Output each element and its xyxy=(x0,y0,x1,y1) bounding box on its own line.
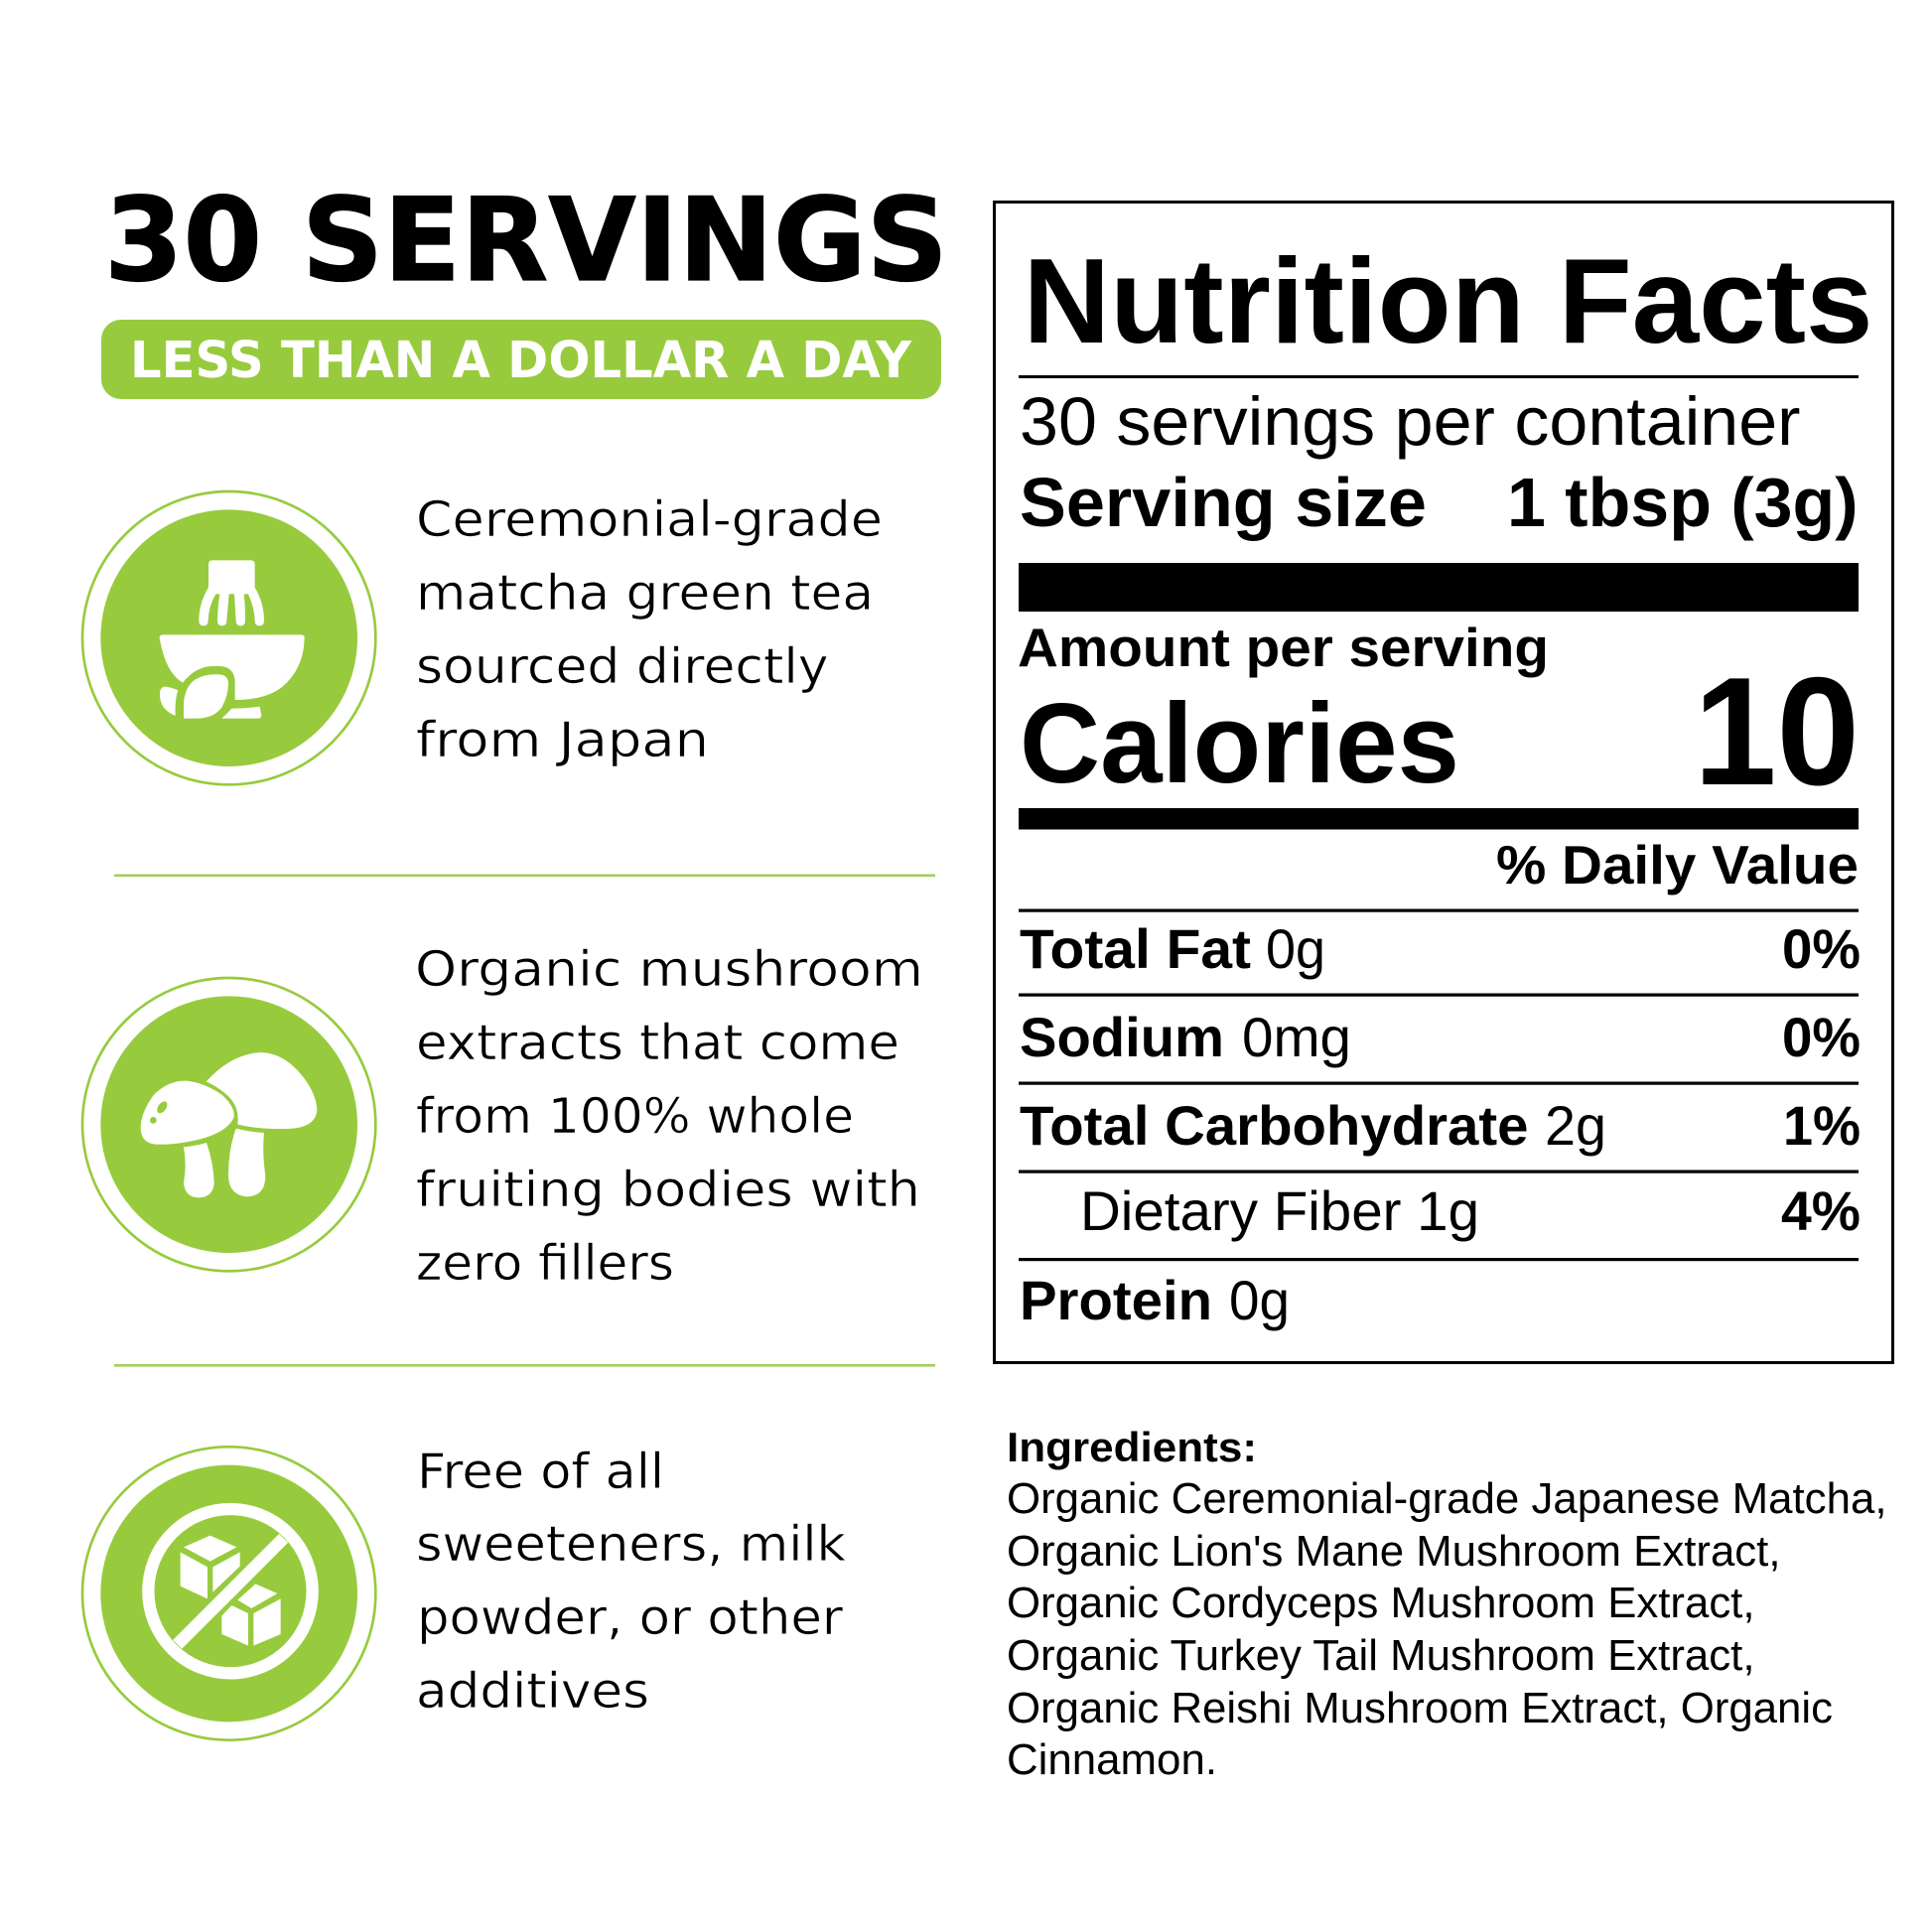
row: total fat xyxy=(1020,917,1861,980)
row: protein: Protein xyxy=(1020,1269,1212,1331)
text: mushroom description xyxy=(415,941,923,1292)
text: matcha description: from Japan xyxy=(416,712,709,768)
calories: 10 xyxy=(1694,645,1860,817)
heading: nutrition facts: Nutrition Facts xyxy=(1023,233,1872,368)
row: total fat: 0% xyxy=(1782,917,1861,980)
text: ingredients: Organic Lion's Mane Mushroom Extract, xyxy=(1007,1527,1781,1576)
row: sodium: 0mg xyxy=(1242,1006,1351,1068)
icon: no sugar cubes xyxy=(82,1447,375,1740)
text: matcha description: Ceremonial-grade xyxy=(416,491,883,548)
calories xyxy=(1020,645,1860,817)
text: additives description: Free of all xyxy=(417,1444,664,1500)
text: mushroom description: from 100% whole xyxy=(416,1088,854,1145)
serving size xyxy=(1020,464,1859,541)
text: matcha description: sourced directly xyxy=(416,638,828,695)
row: sodium xyxy=(1020,1006,1861,1068)
serving size: Serving size xyxy=(1020,464,1427,541)
servings per container: 30 servings per container xyxy=(1020,383,1801,460)
text: additives description xyxy=(416,1444,847,1720)
icon: matcha whisk and bowl xyxy=(82,491,375,784)
row: total carbohydrate: Total Carbohydrate xyxy=(1020,1094,1529,1157)
daily value header: % Daily Value xyxy=(1496,834,1859,896)
row: protein: 0g xyxy=(1229,1269,1290,1331)
text: matcha description xyxy=(416,491,883,768)
text: mushroom description: zero fillers xyxy=(416,1235,674,1292)
banner: less than a dollar a day: LESS THAN A DOLLAR A DAY xyxy=(130,332,912,390)
row: total carbohydrate xyxy=(1020,1094,1861,1157)
text: ingredients: Cinnamon. xyxy=(1007,1735,1217,1784)
serving size: 1 tbsp (3g) xyxy=(1507,464,1859,541)
row: sodium: Sodium xyxy=(1020,1006,1224,1068)
row: total fat: 0g xyxy=(1266,917,1325,980)
icon: mushrooms xyxy=(82,978,375,1271)
calories: Calories xyxy=(1020,681,1459,807)
text: ingredients xyxy=(1007,1424,1886,1784)
text: mushroom description: extracts that come xyxy=(416,1015,899,1071)
amount per serving: Amount per serving xyxy=(1018,617,1549,678)
text: additives description: sweeteners, milk xyxy=(416,1516,847,1573)
text: mushroom description: Organic mushroom xyxy=(415,941,923,998)
text: ingredients: Organic Ceremonial-grade Japanese Matcha, xyxy=(1007,1474,1886,1523)
text: ingredients: Organic Cordyceps Mushroom Extract, xyxy=(1007,1579,1755,1627)
text: additives description: powder, or other xyxy=(417,1589,844,1646)
text: ingredients: Organic Reishi Mushroom Extract, Organic xyxy=(1007,1684,1833,1732)
row: sodium: 0% xyxy=(1782,1006,1861,1068)
row: dietary fiber: 4% xyxy=(1781,1179,1861,1242)
row: total carbohydrate: 1% xyxy=(1783,1094,1861,1157)
text: mushroom description: fruiting bodies with xyxy=(416,1162,920,1218)
row: total fat: Total Fat xyxy=(1020,917,1251,980)
row: dietary fiber: Dietary Fiber 1g xyxy=(1080,1179,1479,1242)
text: matcha description: matcha green tea xyxy=(416,565,874,621)
text: additives description: additives xyxy=(416,1663,649,1720)
title: 30 servings: 30 SERVINGS xyxy=(104,174,948,308)
panel: nutrition facts xyxy=(995,203,1892,1362)
row: total carbohydrate: 2g xyxy=(1545,1094,1606,1157)
row: dietary fiber xyxy=(1080,1179,1861,1242)
text: ingredients: Organic Turkey Tail Mushroom Extract, xyxy=(1007,1631,1755,1680)
text: ingredients: Ingredients: xyxy=(1007,1424,1257,1470)
